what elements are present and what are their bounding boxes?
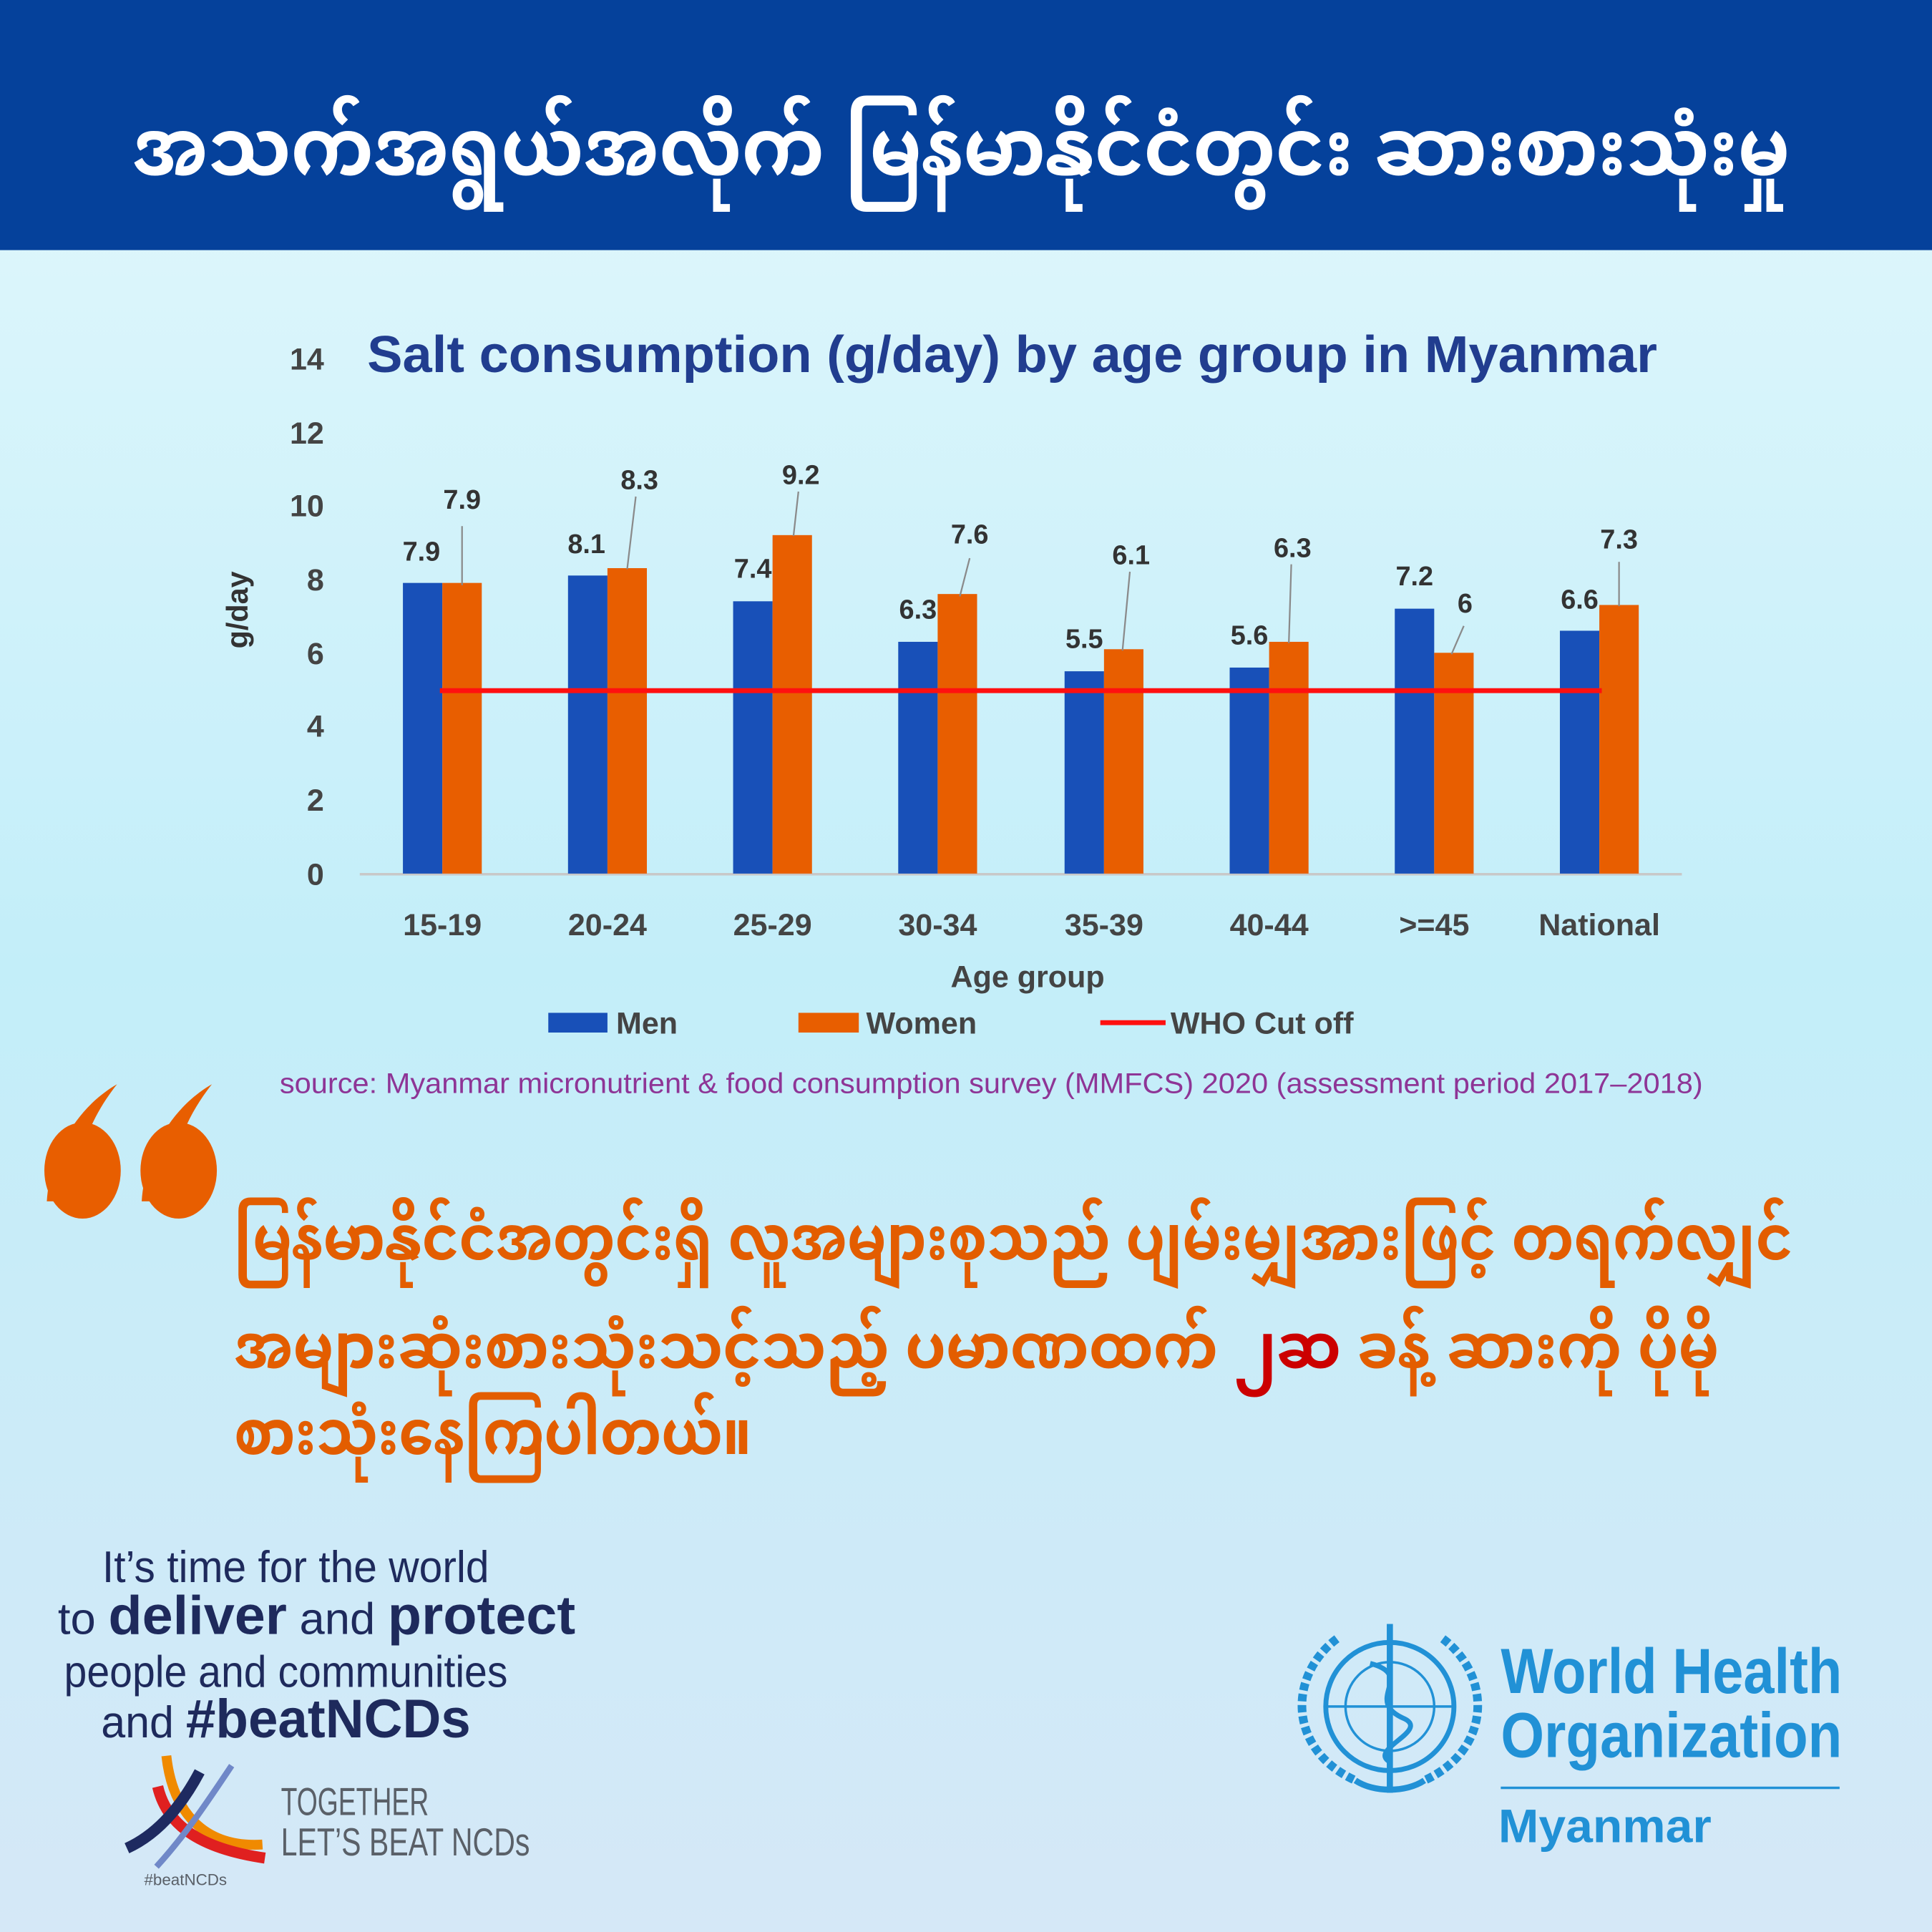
women bars: [442, 535, 1639, 874]
legend: Men: [616, 1007, 678, 1041]
leader lines: [462, 492, 1619, 654]
quote text: အများဆုံးစားသုံးသင့်သည့် ပမာဏထက် ၂ဆ ခန့် ဆားကို ပိုမို: [234, 1304, 1719, 1397]
legend: Women: [867, 1007, 977, 1041]
data labels: 6.3: [899, 595, 937, 625]
logo: together let's beat NCDs: #beatNCDs: [144, 1871, 227, 1889]
quote text: မြန်မာနိုင်ငံအတွင်းရှိ လူအများစုသည် ပျမ်းမျှအားဖြင့် တရက်လျှင်: [234, 1196, 1792, 1289]
quote text: [234, 1196, 1792, 1483]
quote text: စားသုံးနေကြပါတယ်။: [234, 1391, 751, 1483]
slogan text: [58, 1543, 575, 1750]
x axis labels: 40-44: [1230, 908, 1309, 942]
slogan text: people and communities: [64, 1647, 507, 1697]
bar chart: [221, 343, 1682, 994]
logo: WHO emblem: [1302, 1624, 1478, 1792]
y axis labels: 4: [307, 710, 324, 744]
logo: together let's beat NCDs: [127, 1756, 530, 1889]
WHO text: [1498, 1635, 1842, 1852]
y axis labels: 10: [290, 489, 324, 523]
data labels: 6: [1458, 589, 1473, 619]
x axis labels: 20-24: [568, 908, 647, 942]
data labels: 7.6: [951, 519, 988, 550]
data labels: 8.3: [620, 466, 658, 496]
data labels: 7.9: [443, 485, 481, 515]
legend: [548, 1007, 1354, 1041]
data labels: 5.6: [1231, 621, 1268, 651]
y axis labels: 12: [290, 416, 324, 451]
data labels: 6.1: [1112, 541, 1150, 571]
x axis labels: 15-19: [403, 908, 482, 942]
y axis title: g/day: [221, 571, 254, 648]
header banner: [0, 0, 1932, 250]
y axis labels: 14: [290, 343, 324, 377]
y axis labels: [290, 343, 324, 892]
title: အသက်အရွယ်အလိုက် မြန်မာနိုင်ငံတွင်း ဆားစားသုံးမှု: [132, 96, 1790, 212]
chart title: Salt consumption (g/day) by age group in Myanmar: [367, 326, 1657, 384]
data labels: 7.2: [1395, 562, 1433, 592]
data labels: 6.3: [1274, 533, 1312, 563]
men bars: [403, 575, 1599, 874]
logo: together let's beat NCDs: LET’S BEAT NCDs: [281, 1820, 530, 1864]
data labels: [403, 461, 1638, 655]
slogan text: to deliver and protect: [58, 1585, 575, 1646]
y axis labels: 6: [307, 637, 324, 671]
legend: WHO Cut off: [1171, 1007, 1354, 1041]
y axis labels: 2: [307, 784, 324, 818]
WHO text: World Health: [1501, 1635, 1842, 1707]
x axis labels: National: [1538, 908, 1660, 942]
icon: quote mark: [44, 1084, 217, 1219]
WHO text: Myanmar: [1498, 1800, 1712, 1852]
WHO cut-off line: [440, 689, 1602, 692]
y axis labels: 8: [307, 563, 324, 597]
x axis title: Age group: [951, 960, 1105, 994]
y axis labels: 0: [307, 857, 324, 892]
data labels: 7.3: [1600, 525, 1638, 555]
WHO text: Organization: [1501, 1699, 1842, 1770]
x axis labels: 35-39: [1065, 908, 1143, 942]
data labels: 9.2: [782, 461, 820, 491]
data labels: 7.9: [403, 537, 440, 567]
data labels: 5.5: [1065, 625, 1103, 655]
slogan text: It’s time for the world: [102, 1543, 489, 1592]
data labels: 7.4: [734, 555, 771, 585]
logo: together let's beat NCDs: TOGETHER: [281, 1779, 429, 1823]
data labels: 8.1: [567, 530, 605, 560]
x axis labels: >=45: [1399, 908, 1469, 942]
slogan text: and #beatNCDs: [101, 1689, 471, 1750]
x axis labels: [403, 908, 1660, 942]
data labels: 6.6: [1561, 585, 1599, 615]
x axis labels: 30-34: [898, 908, 977, 942]
source: source: Myanmar micronutrient & food consumption survey (MMFCS) 2020 (assessment period 2017–2018): [280, 1068, 1703, 1099]
x axis labels: 25-29: [733, 908, 812, 942]
